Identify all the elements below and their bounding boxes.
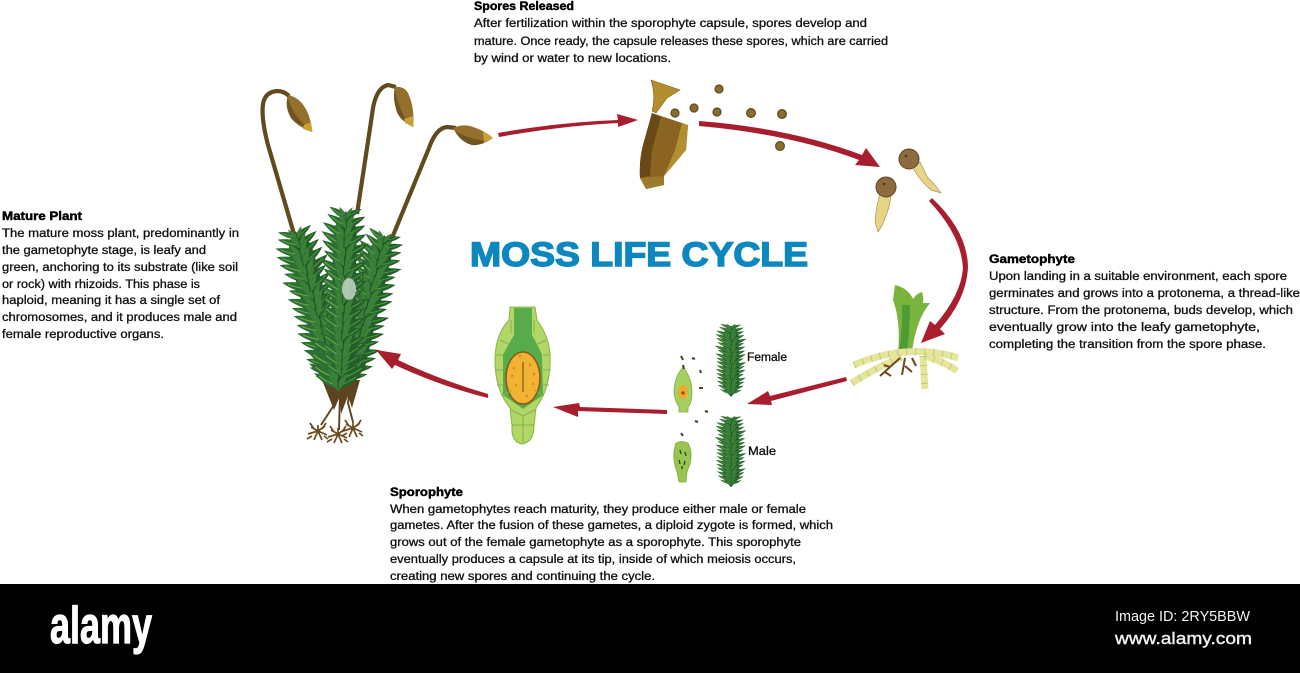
text block: gametophyte: eventually grow into the leafy gametophyte,	[989, 320, 1260, 334]
text block: mature plant: or rock) with rhizoids. This phase is	[2, 277, 200, 291]
arrow: spores to gametophyte	[921, 198, 968, 343]
text block: gametophyte: structure. From the protonema, buds develop, which	[989, 303, 1293, 317]
text block: mature plant	[2, 209, 239, 341]
text block: gametophyte: Gametophyte	[989, 252, 1075, 266]
icon: sporophyte in archegonium	[495, 307, 551, 444]
leafy shoots	[269, 206, 409, 396]
title: MOSS LIFE CYCLE	[470, 236, 808, 274]
text block: gametophyte: completing the transition from the spore phase.	[989, 337, 1266, 351]
text block: mature plant: the gametophyte stage, is leafy and	[2, 243, 206, 257]
text block: mature plant: green, anchoring to its substrate (like soil	[2, 260, 238, 274]
label: female: Female	[747, 350, 787, 364]
text block: mature plant: chromosomes, and it produces male and	[2, 310, 237, 324]
watermark smudge	[342, 278, 356, 300]
icon: mature moss plant	[263, 85, 493, 443]
text block: sporophyte	[390, 485, 833, 583]
icon: female archegonium with gametes	[674, 356, 708, 436]
text block: spores released: by wind or water to new locations.	[474, 51, 671, 65]
text block: sporophyte: creating new spores and continuing the cycle.	[390, 569, 655, 583]
text block: sporophyte: Sporophyte	[390, 485, 463, 499]
text block: sporophyte: eventually produces a capsule at its tip, inside of which meiosis occurs,	[390, 552, 796, 566]
text block: sporophyte: gametes. After the fusion of these gametes, a diploid zygote is formed, which	[390, 518, 833, 532]
text block: gametophyte	[989, 252, 1300, 351]
roots	[307, 380, 363, 443]
arrow: gametophyte to male and female plants	[747, 377, 847, 405]
icon: male antheridium	[674, 442, 691, 482]
text block: mature plant: haploid, meaning it has a single set of	[2, 293, 221, 307]
spores	[671, 85, 786, 150]
text block: mature plant: The mature moss plant, predominantly in	[2, 226, 239, 240]
text block: mature plant: female reproductive organs.	[2, 327, 164, 341]
website: www.alamy.com	[1114, 629, 1252, 648]
icon: open capsule releasing spores	[640, 80, 786, 189]
text block: spores released: After fertilization within the sporophyte capsule, spores develop and	[474, 16, 867, 30]
arrow: capsule to germinating spores	[699, 121, 880, 167]
text block: sporophyte: grows out of the female gametophyte as a sporophyte. This sporophyte	[390, 535, 801, 549]
text block: spores released: mature. Once ready, the capsule releases these spores, which are carried	[474, 34, 888, 48]
arrow: sporophyte to mature plant	[376, 350, 488, 398]
stems and capsules	[263, 85, 493, 238]
text block: mature plant: Mature Plant	[2, 209, 82, 223]
text block: sporophyte: When gametophytes reach maturity, they produce either male or female	[390, 502, 806, 516]
image id: Image ID: 2RY5BBW	[1115, 608, 1251, 625]
logo: alamy: alamy	[50, 597, 152, 655]
arrow: plant to capsule	[498, 114, 638, 137]
text block: gametophyte: germinates and grows into a protonema, a thread-like	[989, 286, 1300, 300]
text block: spores released	[474, 0, 888, 65]
arrow: gametophytes to sporophyte	[553, 403, 667, 417]
icon: germinating spores	[875, 149, 941, 232]
text block: gametophyte: Upon landing in a suitable environment, each spore	[989, 269, 1287, 283]
label: male: Male	[748, 444, 776, 458]
footer bar	[0, 584, 1300, 673]
icon: male gametophyte	[715, 416, 747, 487]
icon: female gametophyte	[715, 324, 747, 397]
icon: young gametophyte with protonema	[852, 285, 958, 389]
